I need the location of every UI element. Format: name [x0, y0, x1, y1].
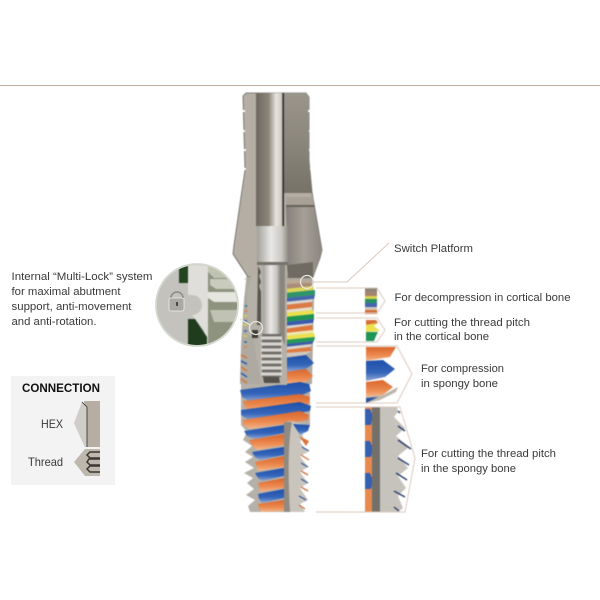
panel: connection legend [11, 376, 115, 485]
label: compression: in spongy bone [421, 378, 498, 390]
icon: hex connection [74, 401, 100, 447]
top rule [0, 85, 600, 86]
label: cutting thread pitch cortical: For cutting the thread pitch [394, 317, 530, 329]
small thread marks on the left flank [241, 306, 248, 383]
cut core and right-hand saw threads [284, 421, 308, 512]
abutment [233, 93, 322, 278]
text: multi-lock description: for maximal abutment [12, 286, 121, 298]
label: decompression: For decompression in cortical bone [394, 292, 570, 304]
panel: cutting thread spongy [316, 407, 415, 512]
abutment lower neck and screw [244, 265, 287, 385]
text: multi-lock description: support, anti-movement [12, 301, 132, 313]
label: cutting thread pitch cortical: in the cortical bone [394, 331, 489, 343]
panel: decompression in cortical bone [316, 288, 385, 314]
panel: cutting thread cortical [316, 318, 385, 342]
blue and orange threads lower [240, 382, 311, 512]
coloured threads upper [285, 279, 315, 385]
magnifier: multi-lock detail [155, 263, 239, 347]
heading: connection: CONNECTION [22, 383, 100, 395]
icon: padlock [169, 292, 184, 311]
label: switch platform: Switch Platform [394, 243, 473, 255]
label: cutting thread spongy: For cutting the thread pitch [421, 448, 556, 460]
label: thread: Thread [28, 455, 63, 469]
text: multi-lock description: and anti-rotation. [12, 316, 96, 328]
label: compression: For compression [421, 363, 504, 375]
lower gray body with saw teeth [241, 384, 310, 512]
label: cutting thread spongy: in the spongy bone [421, 463, 516, 475]
panel: compression spongy [316, 346, 412, 403]
callout line: switch platform [313, 243, 389, 282]
icon: thread connection [74, 449, 100, 476]
implant illustration [233, 93, 322, 512]
implant threaded body [240, 272, 315, 512]
text: multi-lock description: Internal “Multi-Lock” system [12, 271, 152, 283]
label: hex: HEX [41, 417, 63, 431]
callout rings [240, 276, 314, 334]
